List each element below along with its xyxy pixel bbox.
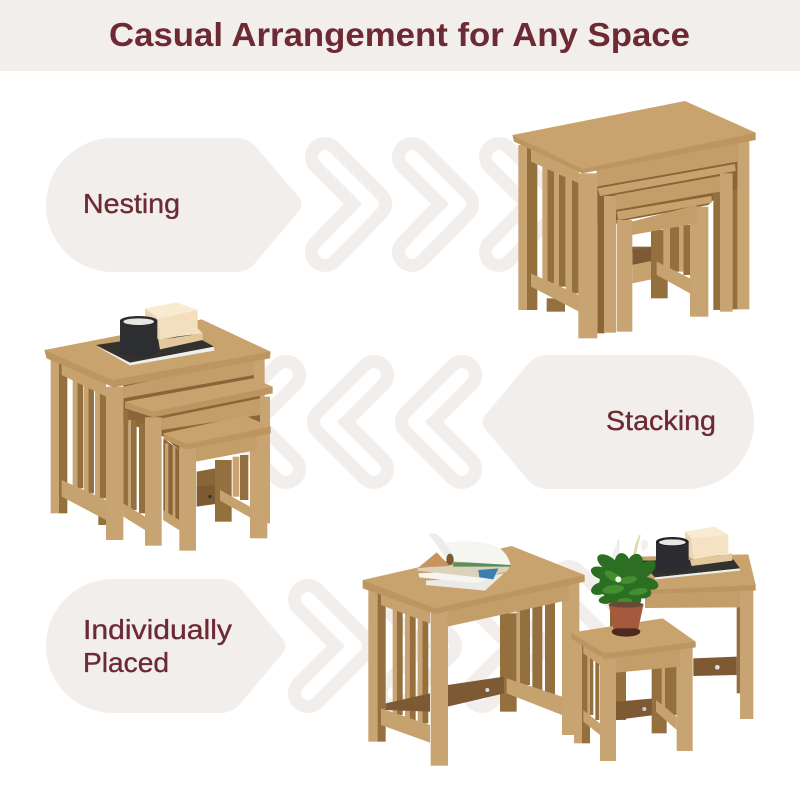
potted plant [589,535,660,607]
tabletop [44,350,271,387]
back table [610,527,756,719]
title: Casual Arrangement for Any Space [109,16,690,53]
cream box [145,302,203,349]
medium table [597,164,736,333]
medium table [123,378,273,546]
label tag: Stacking [482,355,754,489]
tabletop [512,133,756,173]
book [96,346,214,365]
chevron arrows: nesting row [325,157,546,252]
chevron arrows: individually placed row [308,580,616,693]
small table [617,196,712,332]
candle [120,316,157,357]
nesting tables illustration [512,101,756,338]
individually placed tables illustration [363,527,756,766]
large table [363,546,585,766]
label tag: Individually Placed: Placed [83,647,169,678]
small table [163,416,271,551]
label tag: Individually Placed [46,579,286,713]
magazines [417,533,511,591]
chevron arrows: stacking row [239,375,462,469]
label tag: Individually Placed: Individually [83,614,232,645]
pot and saucer on small table [609,602,644,637]
title banner [0,0,800,71]
side frame [527,143,537,310]
small table [571,602,696,761]
label tag: Stacking: Stacking [606,405,716,436]
stacking tables illustration [44,302,273,551]
label tag: Nesting: Nesting [83,188,180,219]
label tag: Nesting [46,138,302,272]
